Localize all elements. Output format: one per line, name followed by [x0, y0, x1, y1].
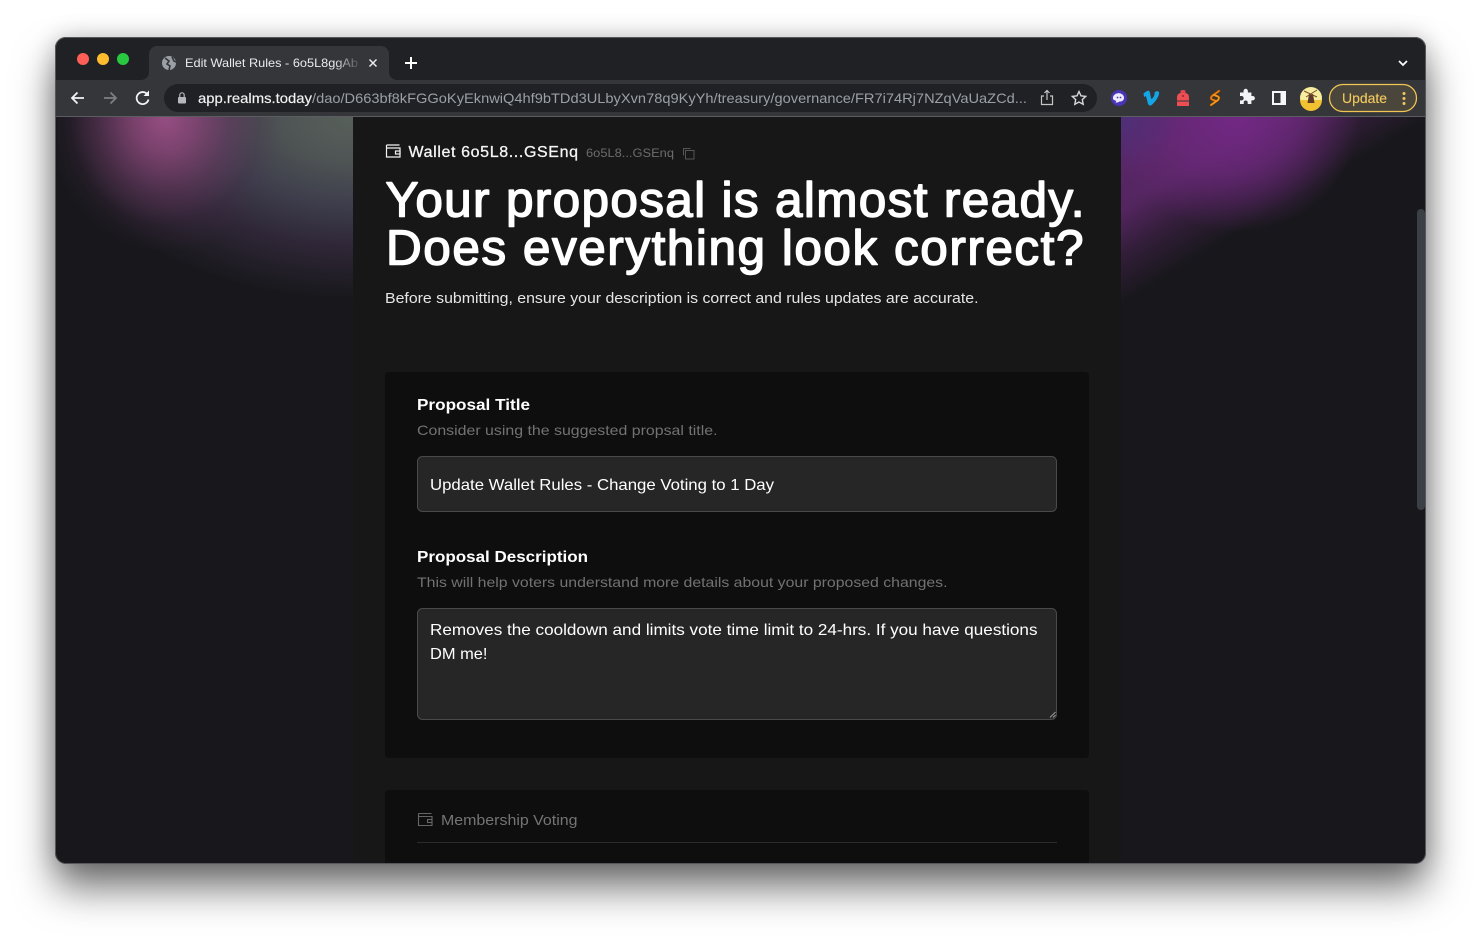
toolbar	[55, 80, 1426, 117]
membership voting label: Membership Voting	[441, 813, 578, 829]
icon: backpack extension	[1177, 90, 1189, 106]
icon: wallet	[386, 145, 400, 157]
update label: Update	[1342, 90, 1387, 106]
icon: profile avatar	[1300, 87, 1322, 111]
icon: back arrow	[72, 92, 84, 104]
icon: copy	[684, 148, 694, 159]
icon: wallet	[418, 814, 432, 826]
title bar	[55, 37, 1426, 80]
proposal description textarea: DM me!	[430, 646, 488, 663]
wallet address: 6o5L8...GSEnq	[586, 146, 674, 160]
proposal title input	[418, 456, 1056, 512]
left background glow	[57, 117, 353, 307]
icon: globe favicon	[162, 56, 176, 70]
icon: reload	[137, 90, 149, 104]
heading: Your proposal is almost ready.	[386, 172, 1084, 227]
proposal title label: Proposal Title	[417, 397, 530, 414]
panel: membership voting	[385, 790, 1089, 864]
heading	[386, 172, 1084, 275]
url path: /dao/D663bf8kFGGoKyEknwiQ4hf9bTDd3ULbyXvn78q9KyYh/treasury/governance/FR7i74Rj7NZqVaUaZCd...	[312, 90, 1027, 106]
proposal title hint: Consider using the suggested propsal title.	[417, 422, 718, 438]
icon: forward arrow	[104, 92, 116, 104]
subheading: Before submitting, ensure your description is correct and rules updates are accurate.	[385, 291, 978, 307]
tab title: Edit Wallet Rules - 6o5L8ggAb	[185, 56, 358, 70]
tab	[141, 46, 397, 80]
proposal title input: Update Wallet Rules - Change Voting to 1 Day	[430, 477, 774, 494]
center content panel	[353, 117, 1121, 864]
icon: tab close	[370, 60, 376, 66]
proposal description textarea: Removes the cooldown and limits vote time limit to 24-hrs. If you have questions	[430, 622, 1038, 639]
icon: ghost extension	[1111, 90, 1127, 106]
wallet header	[386, 144, 694, 161]
heading: Does everything look correct?	[386, 220, 1084, 275]
address bar	[164, 84, 1097, 112]
traffic lights	[77, 53, 129, 65]
wallet name: Wallet 6o5L8...GSEnq	[408, 144, 578, 161]
icon: lock	[178, 93, 186, 104]
icon: share	[1042, 90, 1052, 104]
proposal description hint: This will help voters understand more details about your proposed changes.	[417, 574, 948, 590]
proposal description label: Proposal Description	[417, 549, 588, 566]
icon: tab search chevron	[1399, 61, 1407, 65]
icon: vimeo extension	[1144, 91, 1159, 106]
update button	[1330, 84, 1416, 112]
icon: menu dots	[1402, 92, 1406, 105]
right background glow	[1121, 117, 1425, 322]
proposal description textarea	[418, 608, 1056, 720]
icon: orange S extension	[1211, 91, 1219, 105]
icon: bookmark star	[1072, 92, 1086, 104]
scrollbar	[1417, 209, 1425, 510]
icon: extensions puzzle	[1240, 89, 1255, 104]
panel: proposal form	[385, 372, 1089, 758]
icon: side panel	[1272, 91, 1286, 105]
icon: new tab plus	[405, 57, 417, 69]
url host: app.realms.today	[198, 90, 312, 106]
